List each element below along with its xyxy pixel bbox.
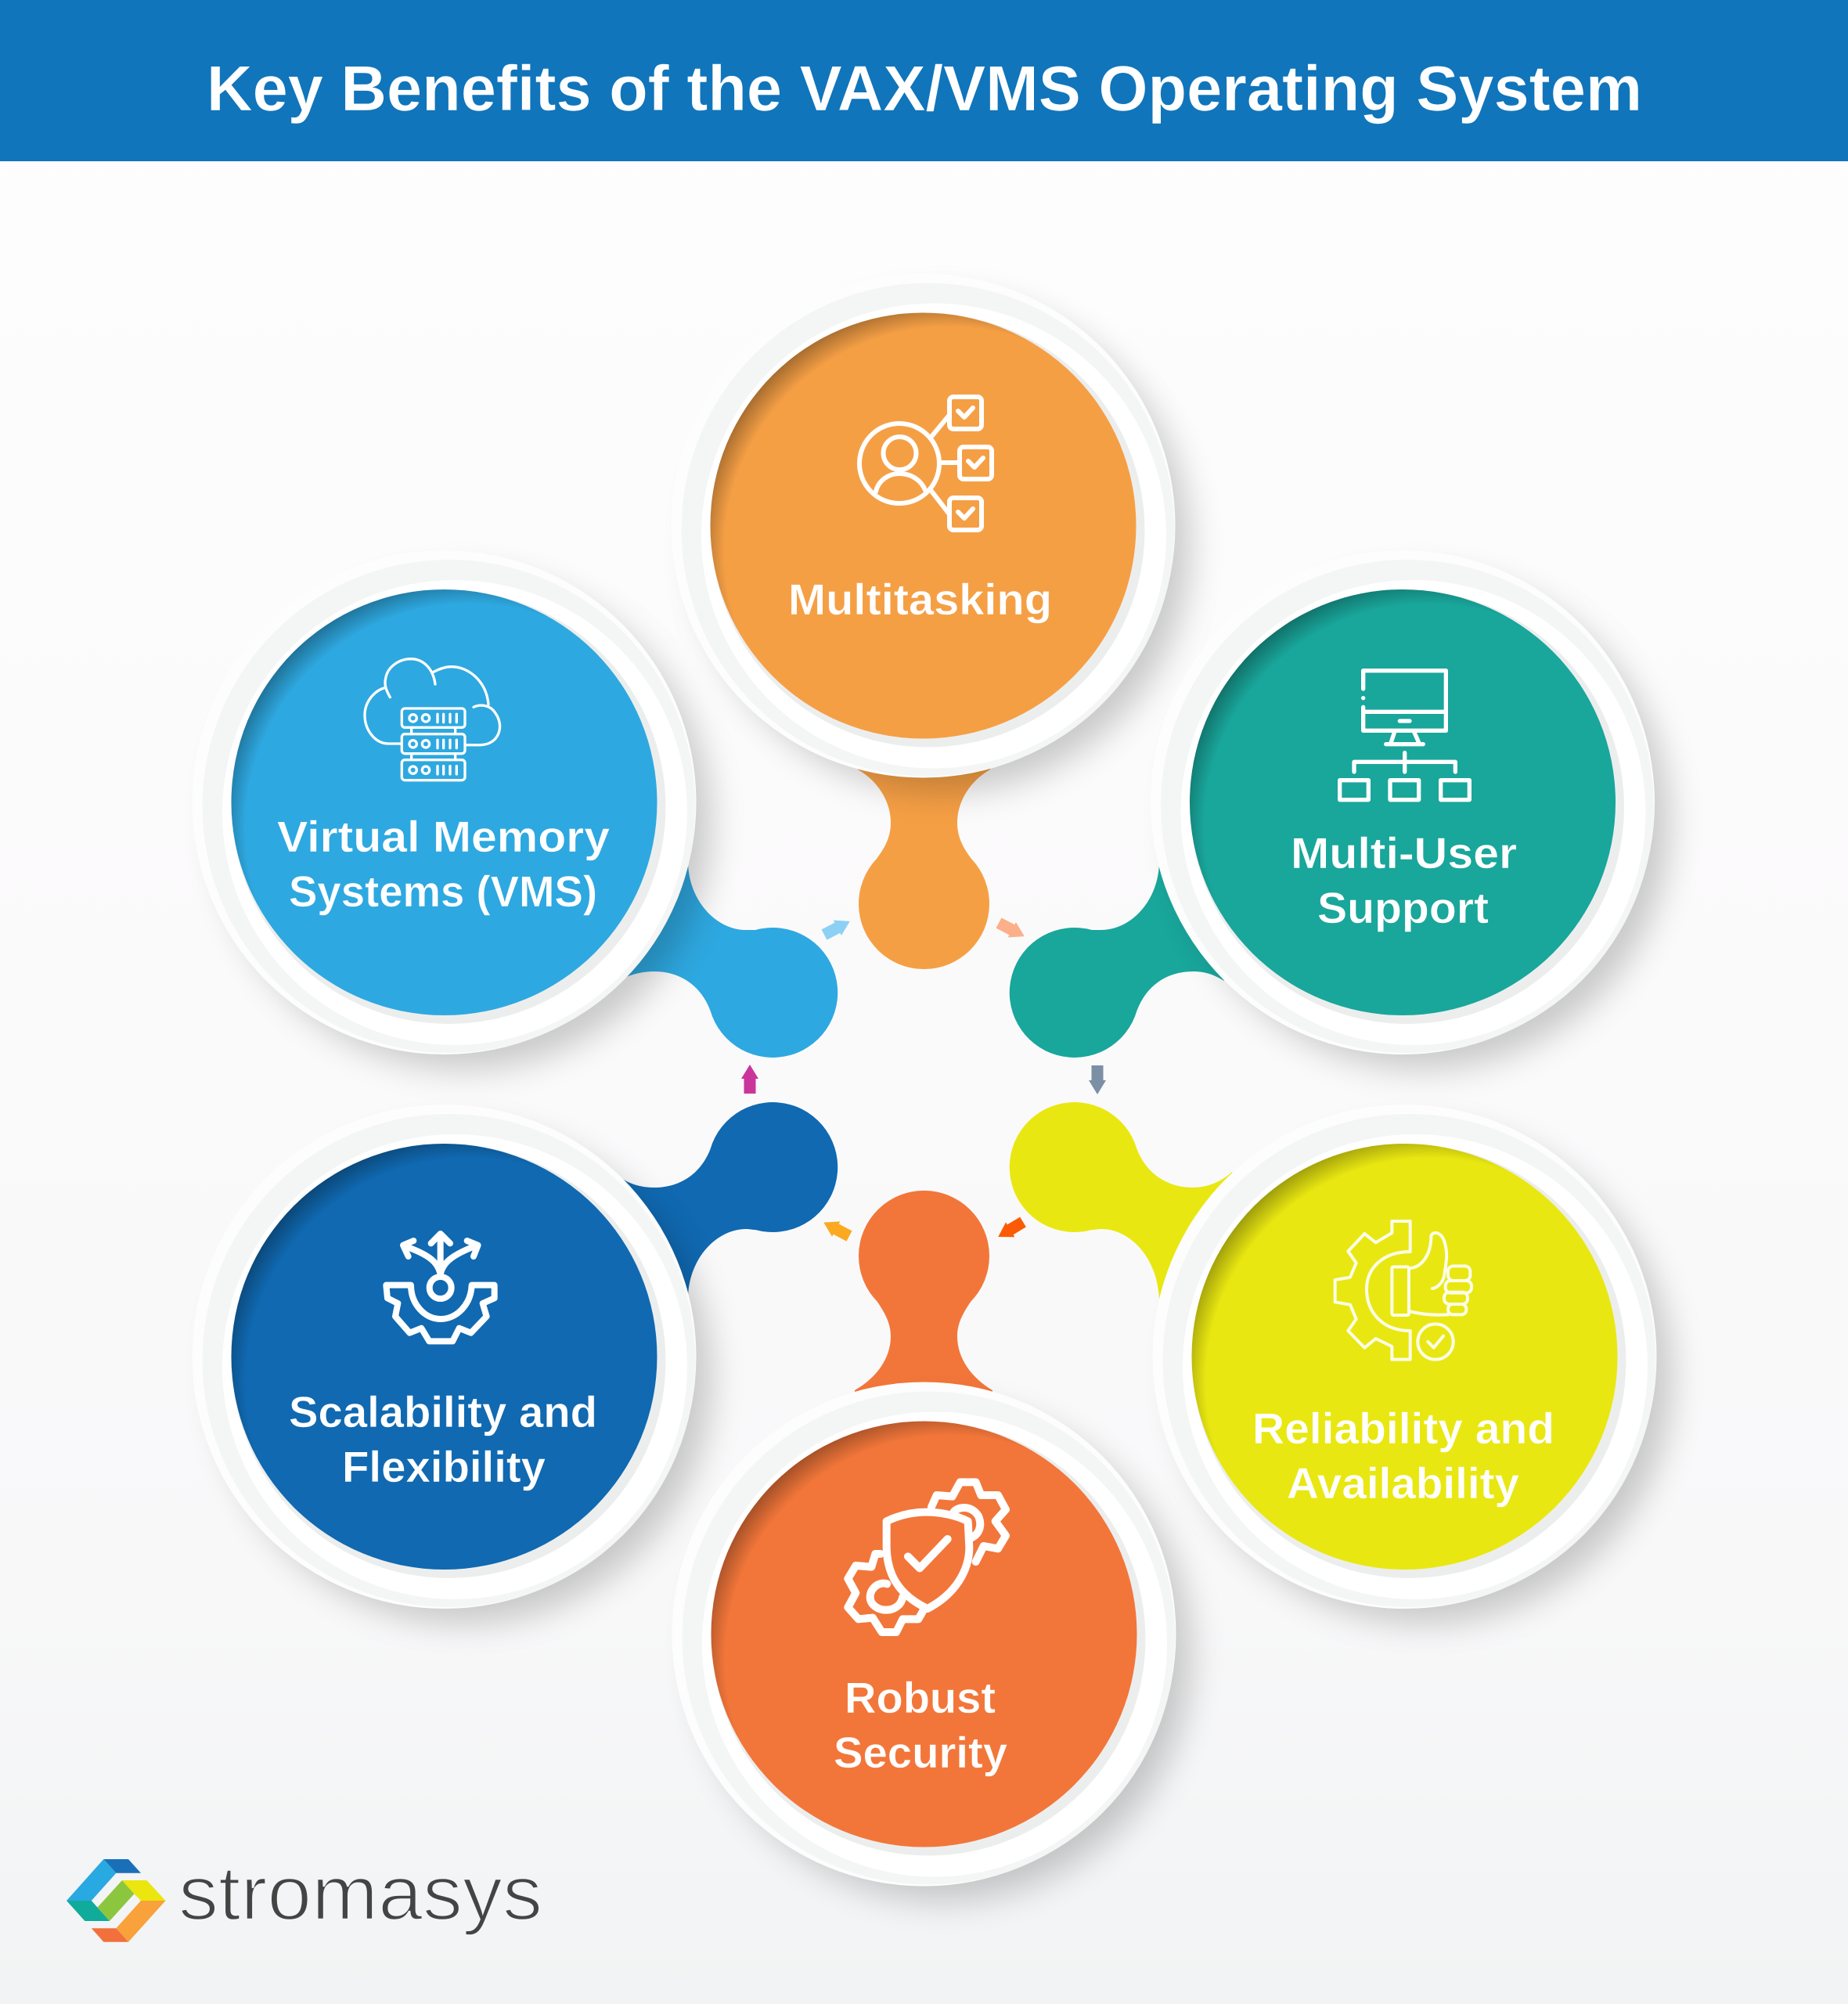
label: robust security: Robust bbox=[845, 1673, 996, 1722]
arrow: red-orange bbox=[994, 1215, 1028, 1244]
panel: multi-user support bbox=[1151, 550, 1670, 1069]
arrow: light blue bbox=[820, 914, 854, 943]
label: multitasking: Multitasking bbox=[788, 575, 1052, 624]
arrow: amber bbox=[820, 1215, 853, 1244]
icon: person with task checkboxes bbox=[859, 397, 992, 530]
label: scalability and flexibility bbox=[289, 1387, 597, 1491]
label: reliability and availability: Availability bbox=[1287, 1458, 1519, 1508]
panel: reliability and availability bbox=[1152, 1105, 1672, 1623]
icon: gear with arrows bbox=[386, 1234, 495, 1341]
connector: multitasking bbox=[858, 759, 990, 969]
logo wordmark: stromasys bbox=[178, 1850, 542, 1936]
arrow: salmon bbox=[995, 915, 1028, 944]
label: robust security: Security bbox=[834, 1728, 1007, 1777]
label: virtual memory systems: Virtual Memory bbox=[277, 812, 610, 861]
icon: shield with gears bbox=[848, 1482, 1006, 1632]
panel: robust security bbox=[672, 1382, 1191, 1901]
label: multi-user support: Support bbox=[1317, 883, 1489, 932]
panel: multitasking bbox=[672, 274, 1190, 792]
panel: virtual memory systems bbox=[193, 550, 711, 1069]
connector: reliability bbox=[1010, 1102, 1245, 1307]
icon: gear with thumbs up bbox=[1335, 1221, 1472, 1360]
icon: cloud server bbox=[365, 659, 500, 780]
logo: stromasys bbox=[67, 1850, 542, 1942]
label: multi-user support bbox=[1291, 828, 1517, 932]
label: multi-user support: Multi-User bbox=[1291, 828, 1517, 878]
label: scalability and flexibility: Scalability and bbox=[289, 1387, 597, 1436]
icon: logo mark bbox=[67, 1859, 166, 1942]
icon: networked computer bbox=[1340, 671, 1469, 800]
label: virtual memory systems: Systems (VMS) bbox=[289, 867, 597, 916]
title banner bbox=[0, 0, 1848, 161]
panel: scalability and flexibility bbox=[193, 1105, 711, 1623]
connector: multi-user bbox=[1010, 853, 1245, 1058]
label: reliability and availability: Reliability and bbox=[1252, 1404, 1554, 1453]
connector: robust security bbox=[855, 1191, 992, 1401]
connector: scalability bbox=[603, 1102, 838, 1307]
arrow: slate bbox=[1089, 1065, 1106, 1094]
label: virtual memory systems bbox=[277, 812, 610, 916]
title: Key Benefits of the VAX/VMS Operating System bbox=[207, 53, 1642, 124]
arrow: magenta bbox=[741, 1065, 758, 1094]
connector: virtual memory bbox=[603, 853, 838, 1058]
label: reliability and availability bbox=[1252, 1404, 1554, 1508]
label: scalability and flexibility: Flexibility bbox=[342, 1442, 546, 1491]
label: robust security bbox=[834, 1673, 1007, 1777]
